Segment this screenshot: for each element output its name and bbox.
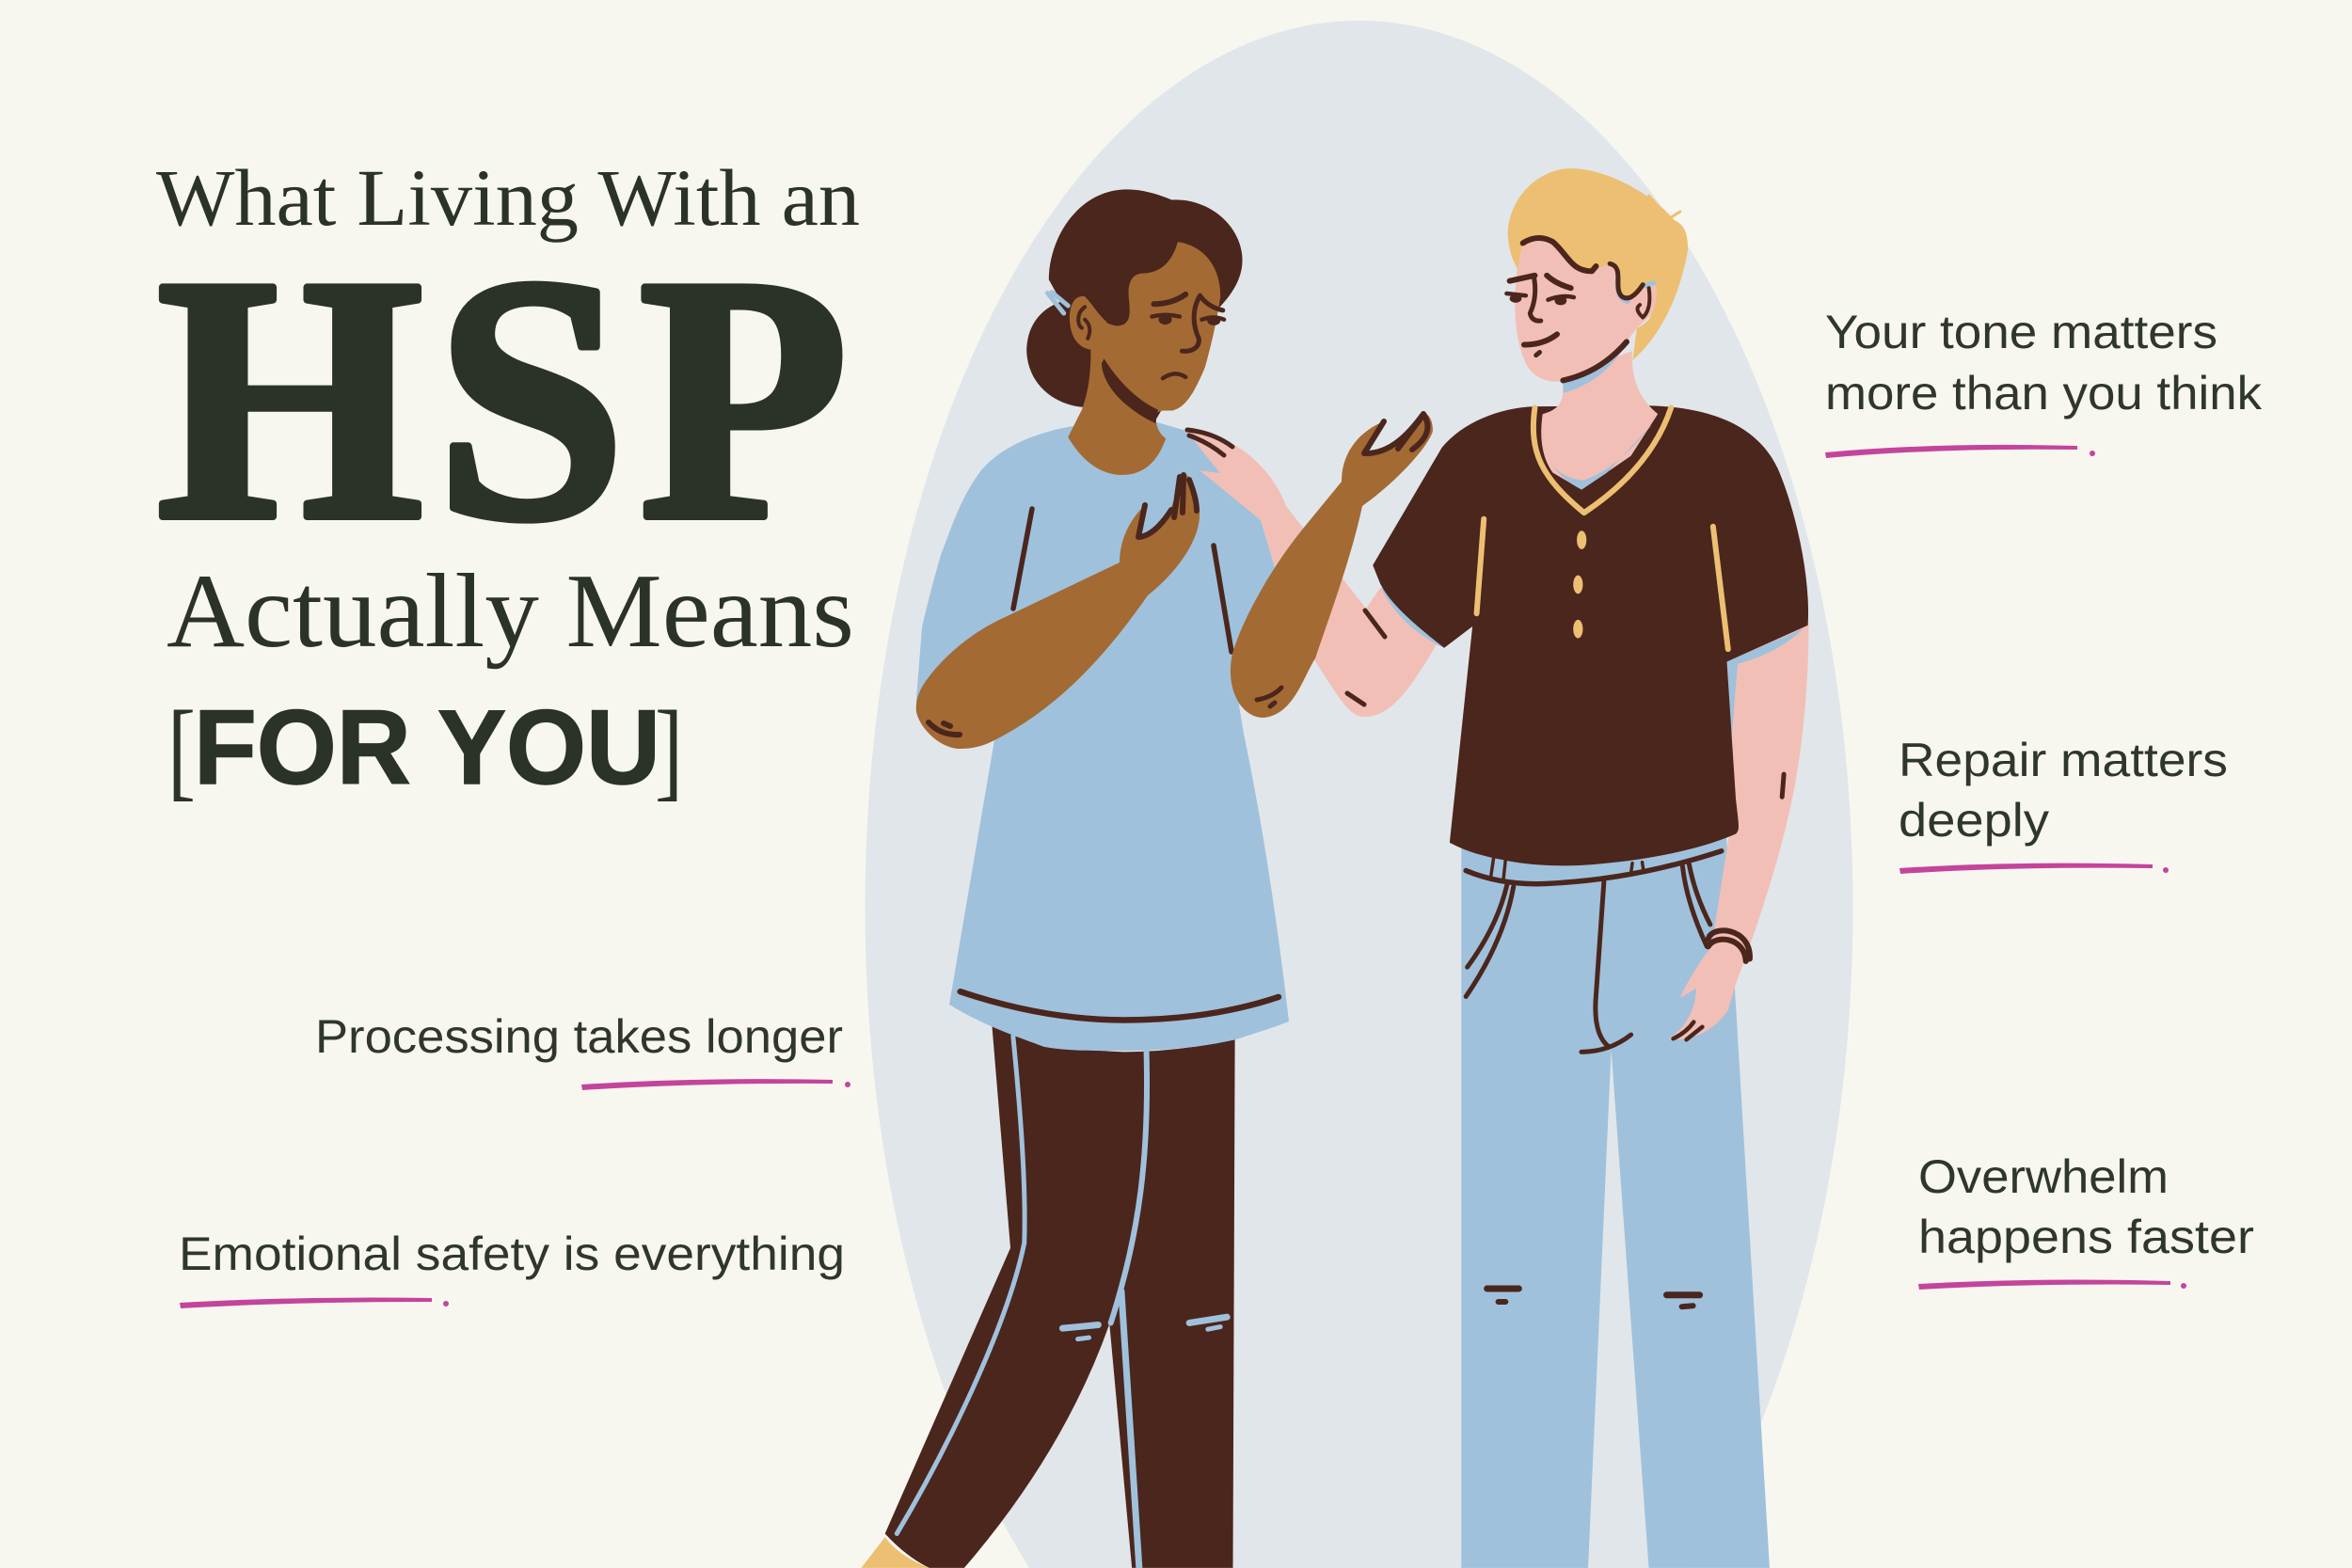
label: your tone matters: Your tone matters	[1825, 306, 2217, 358]
woman arm on chest	[916, 473, 1200, 749]
man shirt, head and hair	[1373, 168, 1808, 865]
label: your tone matters	[1825, 306, 2263, 458]
title line: for you: FOR YOU	[194, 689, 660, 806]
label: your tone matters: more than you think	[1825, 367, 2263, 420]
label: overwhelm	[1918, 1150, 2254, 1290]
label: processing	[315, 1010, 850, 1090]
label: overwhelm: Overwhelm	[1918, 1150, 2169, 1203]
label: repair matters: deeply	[1899, 794, 2049, 847]
oval backdrop	[865, 21, 1852, 1568]
title	[156, 152, 860, 811]
woman trousers	[861, 1025, 1235, 1568]
woman top	[916, 422, 1289, 1051]
label: overwhelm: happens faster	[1918, 1211, 2254, 1263]
man jeans	[1461, 829, 1770, 1568]
label: repair matters	[1899, 734, 2228, 874]
title line: Actually Means: Actually Means	[167, 553, 854, 670]
man left arm and hand on shoulder	[1186, 430, 1444, 717]
woman figure	[861, 189, 1289, 1568]
label: emotional safety	[179, 1227, 845, 1308]
label: processing: Processing takes longer	[315, 1010, 843, 1063]
label: repair matters: Repair matters	[1899, 734, 2228, 786]
title line: What Living With an: What Living With an	[156, 152, 860, 243]
man figure	[1186, 168, 1808, 1568]
woman raised forearm and hand	[1231, 413, 1433, 718]
man right arm and hand	[1669, 623, 1808, 1039]
label: emotional safety: Emotional safety is everything	[179, 1227, 845, 1280]
title line: for you: [	[167, 688, 196, 811]
woman shirt hem line	[961, 991, 1279, 1020]
woman hair and face	[1026, 189, 1243, 475]
title line: for you: ]	[655, 688, 683, 811]
title word: HSP: HSP	[157, 205, 849, 593]
